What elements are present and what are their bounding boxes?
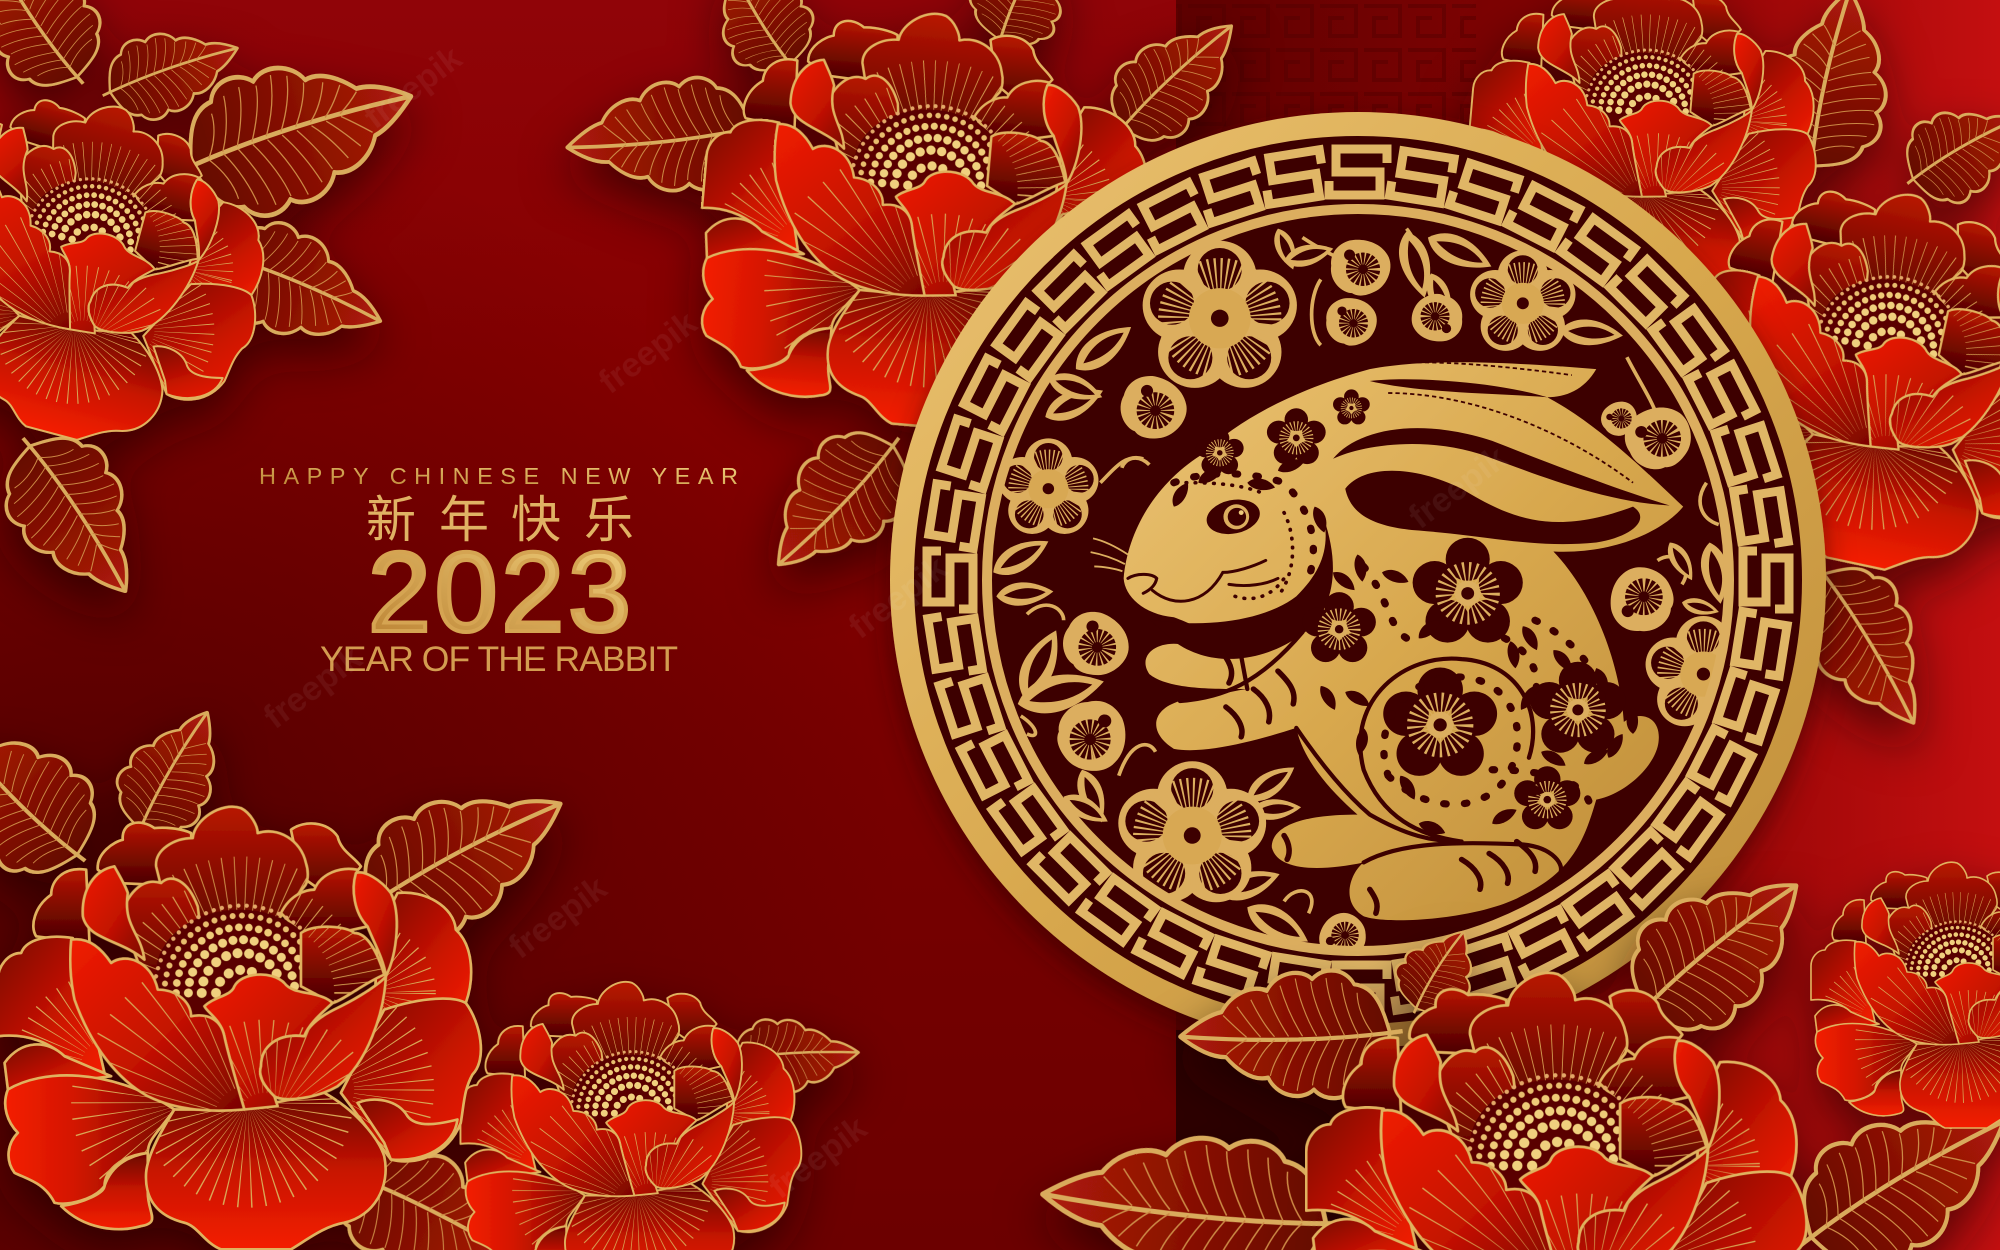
- rabbit: head dots: [1186, 483, 1293, 599]
- watermarks: freepik: [257, 639, 369, 736]
- rabbit: silhouette: [1124, 362, 1683, 920]
- watermarks: freepik: [502, 869, 614, 966]
- rabbit: stripes: [1223, 653, 1536, 913]
- flower cluster: top left: [0, 0, 433, 622]
- flower: far right peony: [1811, 862, 2000, 1128]
- leaf: small top: [1381, 912, 1495, 1032]
- leaf: top left upper: [89, 9, 251, 134]
- rabbit: mouth and nose: [1128, 560, 1278, 601]
- leaf: top left lower: [193, 202, 401, 370]
- background: dark strip bottom: [1176, 1030, 1376, 1250]
- leaf: pointing left: [561, 71, 769, 204]
- flower: bottom middle peony: [460, 982, 801, 1250]
- text: chinese greeting: 新年快乐: [366, 492, 634, 548]
- leaf: far left of bottom left peony: [0, 696, 126, 905]
- flower cluster: top centre: [561, 0, 1262, 601]
- leaf: left drooping: [0, 406, 173, 622]
- rabbit: eye: [1203, 495, 1263, 539]
- watermarks: freepik: [762, 1109, 874, 1206]
- leaf: top left corner: [0, 0, 125, 114]
- rabbit: decorative ticks and swirls: [1174, 474, 1602, 806]
- leaf: right of bottom left peony: [328, 747, 591, 967]
- leaf: top right of flower: [956, 0, 1085, 65]
- background: left red panel: [0, 0, 1176, 1250]
- leaf: top left pointing right: [156, 28, 433, 238]
- rabbit: limb lines: [1180, 632, 1561, 874]
- leaf: far right: [1884, 80, 2000, 221]
- background: left panel lower shading: [0, 0, 1176, 1250]
- background: patterned maze strip top: [1176, 0, 1476, 130]
- leaf: right hanging: [1774, 538, 1959, 750]
- rabbit figure: [1091, 362, 1683, 920]
- leaf: pointing up right: [1596, 835, 1837, 1065]
- floral ornaments and rabbit: [987, 225, 1761, 966]
- rabbit: ear stitches: [1388, 362, 1633, 483]
- medallion: outer gold disc: [890, 112, 1826, 1048]
- text: year of the rabbit: YEAR OF THE RABBIT: [320, 639, 678, 679]
- leaf: top: [689, 0, 832, 94]
- ornaments: vines: [1021, 229, 1719, 913]
- medallion: inner dark field: [986, 208, 1730, 952]
- leaf: lower behind disc: [741, 403, 938, 601]
- watermarks: freepik: [592, 304, 704, 401]
- greeting text block: [259, 463, 738, 679]
- ornaments: flowers: [998, 241, 1761, 902]
- leaf: toward top right: [1085, 0, 1262, 167]
- flower cluster: top right: [1456, 0, 2000, 750]
- watermarks: [257, 39, 1514, 1206]
- flower cluster: bottom left: [0, 689, 861, 1250]
- rabbit: ear hollows: [1333, 379, 1670, 544]
- flower: bottom left peony: [0, 807, 481, 1249]
- leaf: pointing left toward disc: [1179, 969, 1404, 1101]
- gold medallion with rabbit: [753, 33, 1902, 1184]
- text: happy chinese new year: HAPPY CHINESE NEW YEAR: [259, 463, 738, 489]
- flower: top right peony: [1456, 0, 1831, 312]
- medallion: inner gold ring: [987, 209, 1729, 951]
- leaf: top right pointing up: [1750, 0, 1908, 189]
- text: year 2023: 2023: [368, 529, 631, 655]
- flower: top left peony: [0, 62, 300, 477]
- ornaments: buds: [1052, 240, 1703, 966]
- medallion: band around key pattern: [950, 172, 1766, 988]
- ornaments: gold leaves: [987, 225, 1734, 953]
- flower cluster: bottom right: [1035, 835, 2000, 1250]
- watermarks: freepik: [1402, 439, 1514, 536]
- leaf: beneath middle peony right: [723, 1015, 861, 1097]
- flower: right peony: [1644, 154, 2000, 603]
- background: right red panel: [1176, 0, 2000, 1250]
- rabbit: whiskers: [1091, 538, 1128, 571]
- leaf: bottom pointing left: [1035, 1120, 1351, 1250]
- watermarks: freepik: [357, 39, 469, 136]
- flower: bottom right peony: [1306, 973, 1807, 1250]
- flower: top centre peony: [685, 0, 1169, 445]
- rabbit: head outline: [1149, 519, 1333, 659]
- leaf: beneath middle peony: [302, 1111, 547, 1250]
- watermarks: freepik: [842, 549, 954, 646]
- rabbit: body flowers: [1196, 389, 1626, 829]
- leaf: upper of bottom left peony: [97, 689, 246, 858]
- medallion: greek key ring: [753, 33, 1902, 1184]
- leaf: bottom right: [1764, 1063, 2000, 1250]
- rabbit: dark leaf marks: [1168, 455, 1638, 838]
